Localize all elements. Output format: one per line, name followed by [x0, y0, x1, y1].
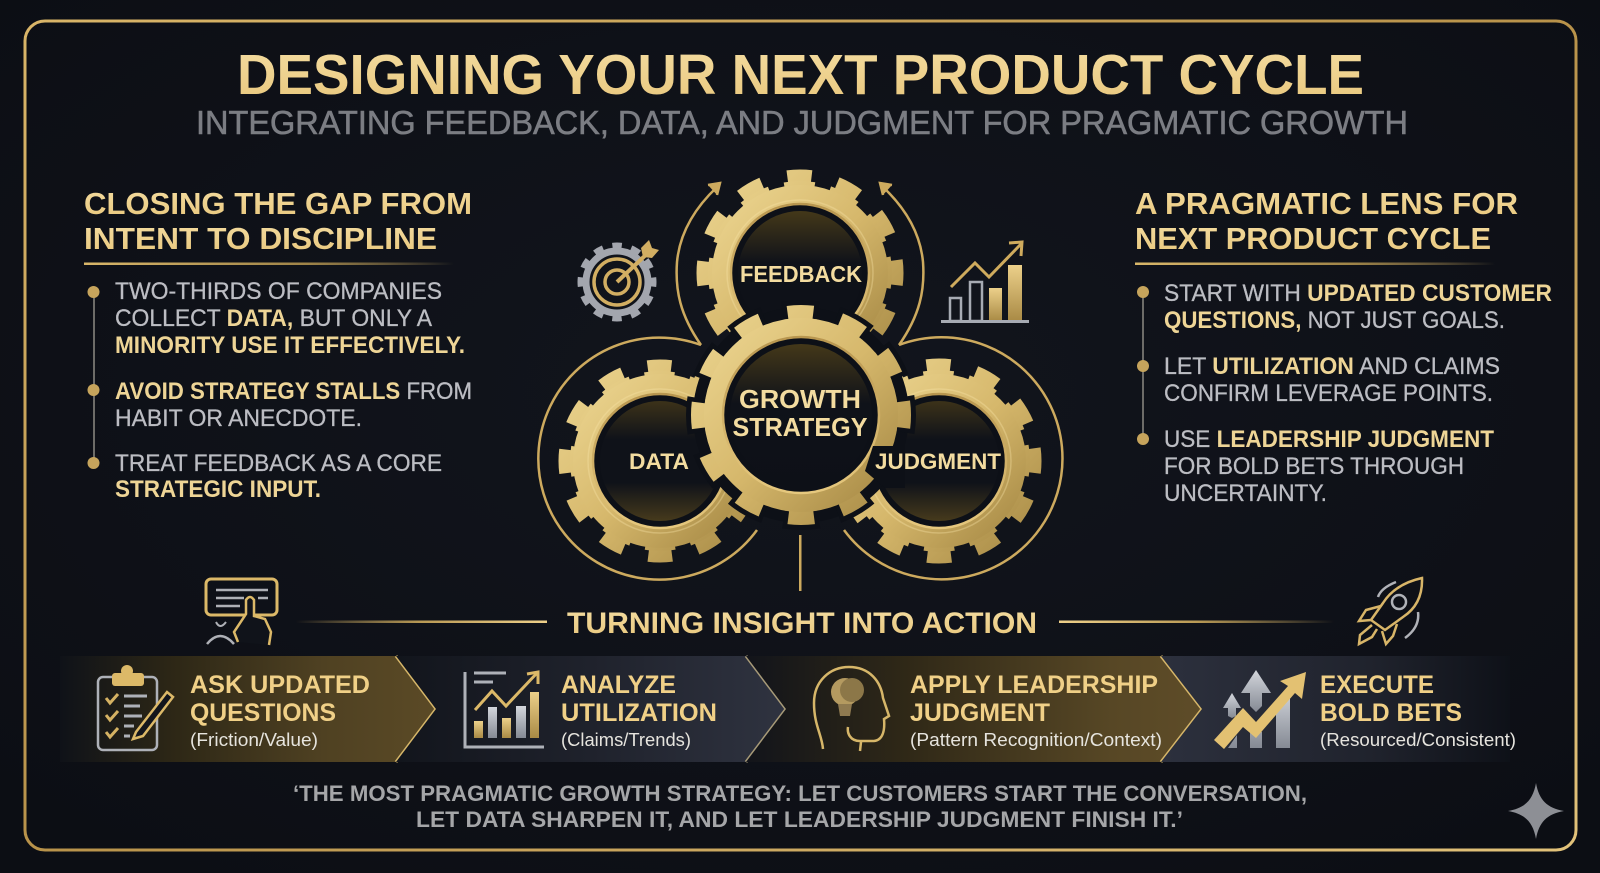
bullet: utilization and claims: CONFIRM LEVERAGE POINTS. [1164, 380, 1493, 407]
icon: rocket [1359, 578, 1422, 644]
icon: clipboard [98, 665, 173, 750]
step: apply leadership judgment [746, 656, 1202, 762]
icon: gear target [582, 240, 659, 317]
bullet: utilization and claims [1137, 353, 1500, 407]
text: analyze utilization: UTILIZATION [561, 699, 717, 727]
heading: closing the gap: INTENT TO DISCIPLINE [84, 221, 437, 256]
label: judgment: JUDGMENT [875, 449, 1002, 474]
label: growth strategy: STRATEGY [732, 412, 868, 442]
icon: touch screen feedback [206, 579, 277, 645]
step: ask updated questions [60, 656, 436, 762]
bullet: two-thirds of companies: TWO-THIRDS OF COMPANIES [115, 278, 442, 305]
bullet: avoid strategy stalls: AVOID STRATEGY STALLS FROM [115, 378, 472, 405]
text: analyze utilization: ANALYZE [561, 671, 676, 699]
text: ask updated questions [190, 671, 370, 750]
bullet: two-thirds of companies: COLLECT DATA, BUT ONLY A [115, 305, 432, 332]
process band [60, 656, 1516, 762]
text: ask updated questions: (Friction/Value) [190, 730, 318, 750]
bullet: avoid strategy stalls [88, 378, 472, 432]
label: growth strategy: GROWTH [739, 384, 861, 414]
bullet: avoid strategy stalls: HABIT OR ANECDOTE. [115, 405, 362, 432]
step: execute bold bets [1161, 656, 1516, 762]
quote: ‘THE MOST PRAGMATIC GROWTH STRATEGY: LET CUSTOMERS START THE CONVERSATION, [293, 781, 1307, 806]
step: analyze utilization [396, 656, 786, 762]
text: apply leadership judgment: JUDGMENT [910, 699, 1050, 727]
text: apply leadership judgment [910, 671, 1162, 750]
bullet: leadership judgment [1137, 426, 1494, 507]
bullet: treat feedback: STRATEGIC INPUT. [115, 476, 321, 503]
text: execute bold bets [1320, 671, 1516, 750]
text: execute bold bets: (Resourced/Consistent) [1320, 730, 1516, 750]
quote: LET DATA SHARPEN IT, AND LET LEADERSHIP JUDGMENT FINISH IT.’ [416, 807, 1183, 832]
icon: sparkle [1508, 783, 1564, 839]
icon: utilization chart [465, 672, 544, 747]
quote [293, 781, 1307, 832]
icon: head with lightbulb [814, 667, 889, 751]
gear: data [568, 369, 752, 553]
text: execute bold bets: BOLD BETS [1320, 699, 1462, 727]
bullet: two-thirds of companies [88, 278, 465, 359]
bullet: treat feedback: TREAT FEEDBACK AS A CORE [115, 450, 442, 477]
bullet: treat feedback [88, 450, 442, 503]
cycle arrows [538, 183, 1062, 580]
heading: pragmatic lens [1135, 186, 1518, 256]
text: apply leadership judgment: APPLY LEADERSHIP [910, 671, 1158, 699]
gear: judgment [846, 368, 1032, 554]
connector line [799, 535, 802, 591]
heading: turning insight into action: TURNING INSIGHT INTO ACTION [567, 607, 1037, 640]
text: analyze utilization [561, 671, 717, 750]
text: apply leadership judgment: (Pattern Recognition/Context) [910, 730, 1162, 750]
heading: closing the gap [84, 186, 472, 256]
text: analyze utilization: (Claims/Trends) [561, 730, 691, 750]
heading: closing the gap: CLOSING THE GAP FROM [84, 186, 472, 221]
text: ask updated questions: QUESTIONS [190, 699, 336, 727]
heading: pragmatic lens: A PRAGMATIC LENS FOR [1135, 186, 1518, 221]
bullet: two-thirds of companies: MINORITY USE IT EFFECTIVELY. [115, 332, 465, 359]
text: execute bold bets: EXECUTE [1320, 671, 1434, 699]
panel: pragmatic lens [1135, 186, 1552, 507]
bullet: updated customer questions [1137, 280, 1552, 334]
label: feedback: FEEDBACK [740, 261, 862, 287]
icon: bold bets arrows [1214, 670, 1306, 749]
label: data: DATA [629, 449, 689, 474]
icon: growth bar chart [941, 242, 1029, 323]
gear: growth strategy [693, 307, 909, 523]
subtitle: INTEGRATING FEEDBACK, DATA, AND JUDGMENT FOR PRAGMATIC GROWTH [196, 104, 1408, 141]
bullet: leadership judgment: FOR BOLD BETS THROUGH [1164, 453, 1464, 480]
panel: closing the gap [84, 186, 472, 503]
title: DESIGNING YOUR NEXT PRODUCT CYCLE [237, 43, 1364, 107]
text: ask updated questions: ASK UPDATED [190, 671, 370, 699]
bullet: updated customer questions: QUESTIONS, NOT JUST GOALS. [1164, 307, 1505, 334]
bullet: updated customer questions: START WITH UPDATED CUSTOMER [1164, 280, 1552, 307]
heading: pragmatic lens: NEXT PRODUCT CYCLE [1135, 221, 1491, 256]
gear diagram [538, 179, 1062, 591]
bullet: utilization and claims: LET UTILIZATION AND CLAIMS [1164, 353, 1500, 380]
label: growth strategy [732, 384, 868, 442]
gear: feedback [706, 179, 894, 367]
bullet: leadership judgment: UNCERTAINTY. [1164, 480, 1327, 507]
bullet: leadership judgment: USE LEADERSHIP JUDGMENT [1164, 426, 1494, 453]
